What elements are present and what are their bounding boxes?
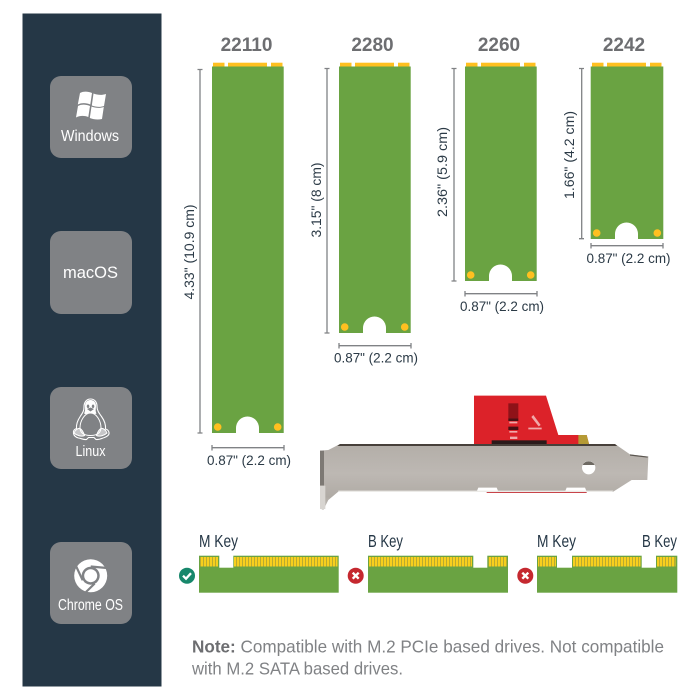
icon: green check	[179, 568, 195, 584]
note	[191, 636, 664, 678]
length: 2280: 3.15" (8 cm)	[308, 162, 324, 238]
heading: 2280: 2280	[351, 35, 394, 56]
icon: Chrome logo	[74, 559, 107, 592]
label: Linux: Linux	[76, 443, 106, 460]
length: 22110: 4.33" (10.9 cm)	[181, 204, 197, 300]
length: 2242: 1.66" (4.2 cm)	[561, 111, 577, 199]
label: M Key: M Key	[537, 531, 576, 551]
panel: operating systems sidebar	[22, 14, 162, 686]
photo: PCIe adapter card with bracket	[320, 396, 648, 510]
heading: 22110: 22110	[221, 35, 272, 56]
drive: 2260	[434, 35, 544, 314]
label: B Key: B Key	[642, 531, 677, 551]
icon: Linux penguin	[73, 399, 109, 440]
drive: 22110	[181, 35, 291, 468]
drive: 2242	[561, 35, 670, 266]
width: 2242: 0.87" (2.2 cm)	[586, 250, 670, 266]
key diagram: M+B Key not compatible	[517, 531, 677, 593]
note: Note: Compatible with M.2 PCIe based drives. Not compatible	[192, 636, 664, 656]
label: M Key: M Key	[199, 531, 238, 551]
drive: 2280	[308, 35, 418, 366]
label: Windows: Windows	[61, 128, 119, 145]
key diagram: M Key compatible	[179, 531, 339, 593]
tile: macOS	[50, 231, 132, 314]
note: with M.2 SATA based drives.	[191, 658, 403, 678]
icon: Windows flag	[76, 92, 106, 120]
length: 2260: 2.36" (5.9 cm)	[434, 127, 450, 217]
label: B Key: B Key	[368, 531, 403, 551]
width: 2260: 0.87" (2.2 cm)	[460, 298, 544, 314]
icon: red cross	[348, 568, 364, 584]
width: 22110: 0.87" (2.2 cm)	[207, 452, 291, 468]
heading: 2260: 2260	[478, 35, 520, 56]
label: macOS: macOS	[63, 263, 118, 282]
tile: Windows	[50, 76, 132, 158]
icon: red cross	[517, 568, 533, 584]
tile: Linux	[50, 387, 132, 469]
heading: 2242: 2242	[603, 35, 645, 56]
width: 2280: 0.87" (2.2 cm)	[334, 350, 418, 366]
tile: Chrome OS	[50, 542, 132, 624]
key diagram: B Key not compatible	[348, 531, 508, 593]
label: Chrome OS: Chrome OS	[58, 597, 123, 614]
